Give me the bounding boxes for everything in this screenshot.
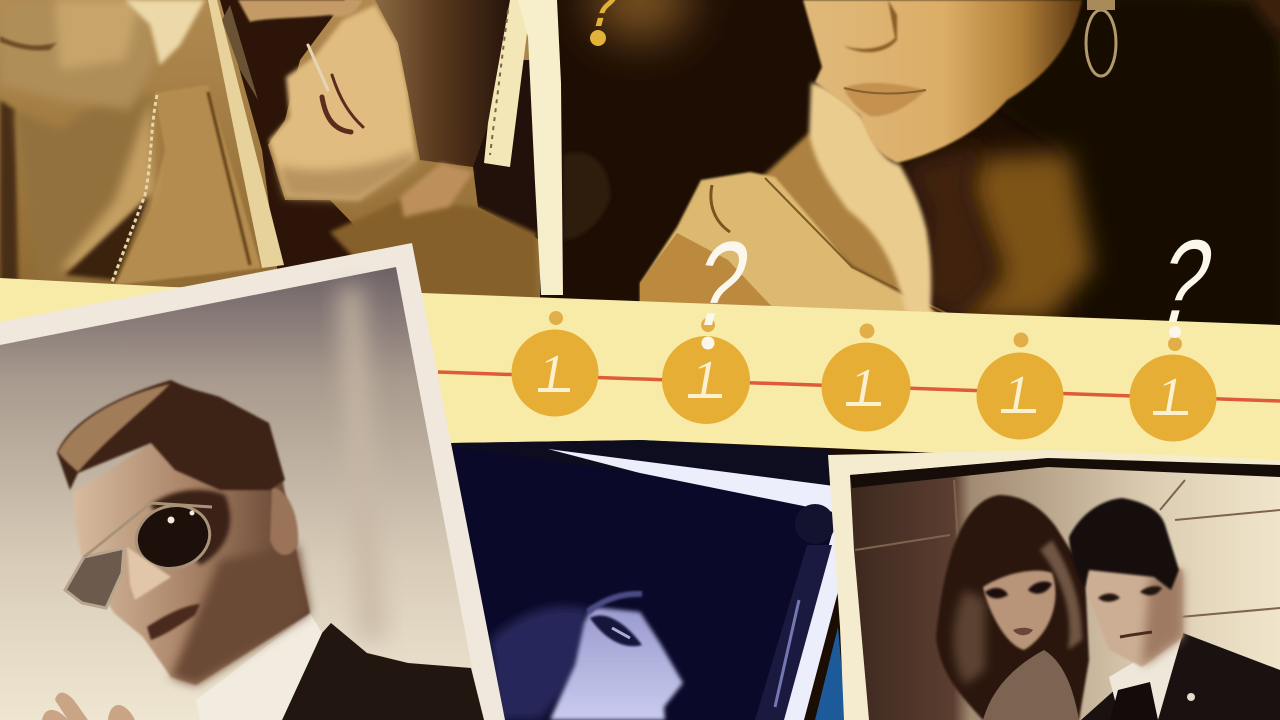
man's hair [1069,498,1179,590]
woman's lips [1013,628,1033,635]
suit [282,623,484,720]
railing post [755,504,835,720]
face [803,0,1082,163]
dress shoulder [640,172,950,320]
man's suit [1081,633,1280,720]
badge 5: 1 [1157,368,1183,425]
closed eye [308,45,363,132]
long dark hair [1000,0,1280,340]
neck shadow [900,145,1000,320]
jacket panel [115,85,261,285]
man's shirt [1109,633,1183,720]
man's bow tie [1110,682,1158,720]
hand [42,693,135,720]
question mark: white over badge 2: ? [679,217,762,351]
badge 4: 1 [1004,366,1030,423]
white frame [548,449,865,720]
hoop earring [1086,10,1116,76]
face [550,607,683,720]
backing sheet behind blue photo [452,440,830,520]
chest skin [762,133,950,320]
shoulder [330,200,536,300]
timeline red line [438,372,1280,401]
dark hair behind face [220,0,420,293]
eye socket shadow [150,490,230,565]
man's lips [1120,632,1152,637]
man's face [1087,560,1183,667]
polaroid: couple portrait [828,450,1280,720]
badge 1: 1 [539,345,565,402]
collar [196,613,322,720]
lips [844,83,926,116]
nose shadow [844,0,897,52]
neck shadow [171,545,310,685]
woman's hair [936,495,1089,720]
eye [590,616,642,646]
badge 3 [822,324,910,432]
straight brown hair [375,0,512,167]
photo: top right woman with hoop earring [540,0,1280,340]
mouth [147,604,200,640]
hand under chin [809,83,931,320]
kissing woman's face [269,5,416,200]
polaroid: man in sunglasses [0,243,505,720]
neck lit side [950,153,1093,320]
cream vertical torn strip [518,0,563,295]
timeline markers with number badges [512,311,1216,442]
nose [127,547,171,600]
badge 2 [662,318,750,424]
ear [270,487,298,555]
face [73,440,310,685]
ear [400,163,473,217]
woman's lace top [983,650,1079,720]
blue corner behind frame [815,627,846,720]
jacket lapel stripe [208,0,284,268]
badge 2: 1 [692,351,718,408]
polaroid: blue-tinted woman [453,447,865,720]
cream timeline band [0,278,1280,465]
lapel pin [1187,693,1195,701]
badge 5 [1130,337,1216,442]
hair strands [490,606,590,720]
photo: top left couple close-up [0,0,540,310]
sunglasses [65,497,217,608]
badge 4 [976,332,1064,440]
woman's face [983,571,1056,650]
hair [57,380,285,490]
chin above [238,0,362,22]
badge 3: 1 [850,359,876,416]
torn paper strip [484,0,527,167]
left sleeve shading [0,100,18,285]
badge 1 [512,311,598,416]
question mark: white over badge 5: ? [1144,217,1225,348]
man's eyes [1098,586,1162,602]
